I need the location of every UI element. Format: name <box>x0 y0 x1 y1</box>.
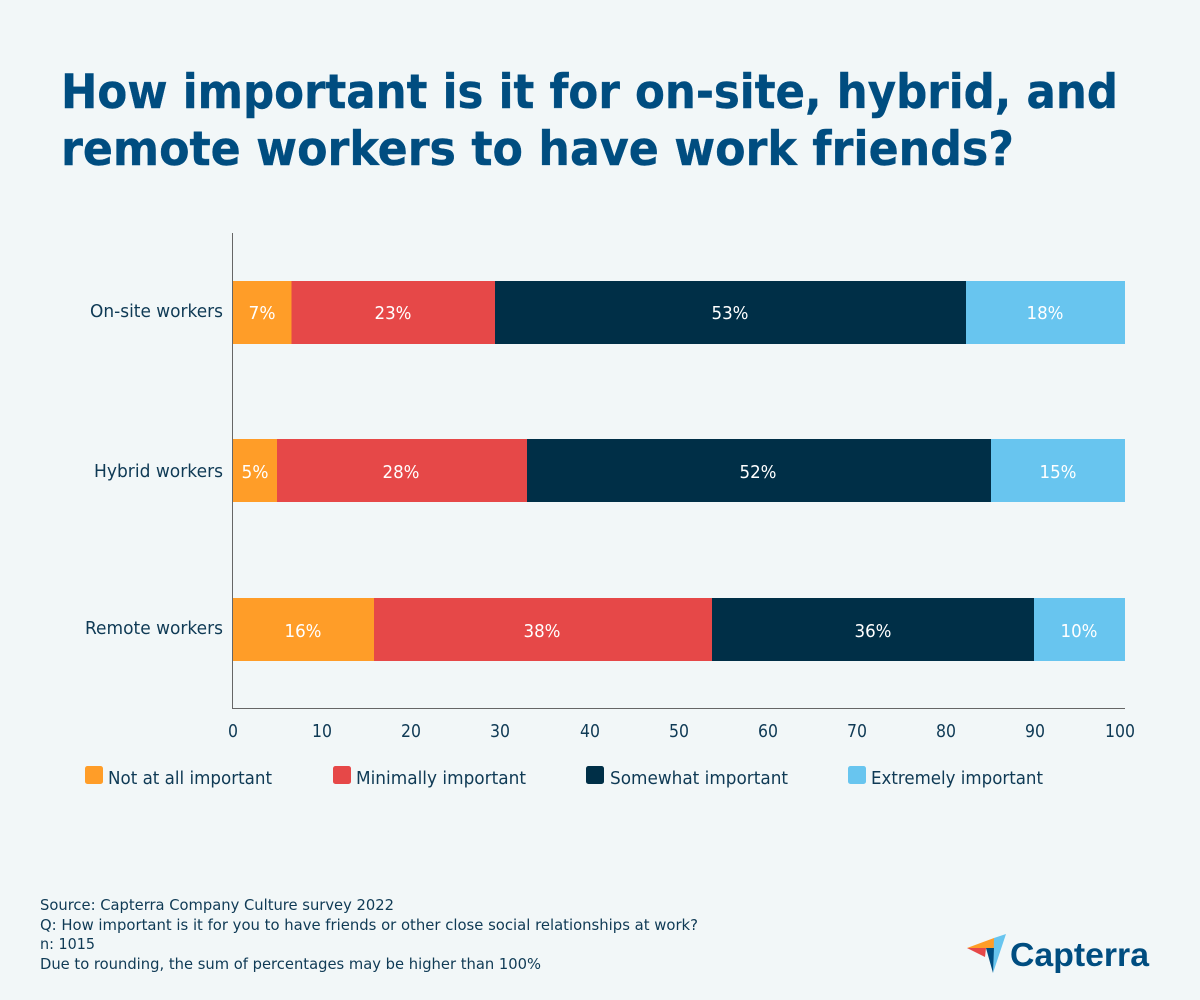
bar: hybrid workers: 15% <box>1040 463 1076 483</box>
x axis labels: 10 <box>312 722 332 742</box>
source notes: Source: Capterra Company Culture survey 2022 <box>40 896 394 914</box>
x axis labels: 0 <box>228 722 238 742</box>
x axis labels: 50 <box>669 722 689 742</box>
bar: on-site workers: 23% <box>374 304 412 324</box>
title <box>61 65 1118 177</box>
bar: on-site workers: 7% <box>248 304 276 324</box>
bar: hybrid workers: 52% <box>740 463 776 483</box>
x axis labels: 40 <box>580 722 600 742</box>
bar: on-site workers <box>233 281 1125 344</box>
bar: hybrid workers: 28% <box>382 463 420 483</box>
category labels <box>85 302 223 639</box>
bar: remote workers <box>233 598 1125 661</box>
source notes: n: 1015 <box>40 935 95 953</box>
source notes <box>40 896 698 973</box>
legend: minimally important: Minimally important <box>356 769 526 789</box>
bar: remote workers: 10% <box>1060 622 1098 642</box>
legend: extremely important: Extremely important <box>871 769 1043 789</box>
source notes: Q: How important is it for you to have friends or other close social relationships at work? <box>40 916 698 934</box>
bar: remote workers: 16% <box>284 622 322 642</box>
icon: paper plane <box>967 934 1006 973</box>
bar: on-site workers: 53% <box>712 304 748 324</box>
Capterra logo <box>967 934 1149 974</box>
x axis labels <box>228 722 1135 742</box>
title: How important is it for on-site, hybrid, and <box>61 65 1118 120</box>
chart axes <box>232 233 1125 708</box>
x axis labels: 80 <box>936 722 956 742</box>
x axis labels: 100 <box>1105 722 1135 742</box>
bar: on-site workers: 18% <box>1026 304 1064 324</box>
source notes: Due to rounding, the sum of percentages may be higher than 100% <box>40 955 541 973</box>
x axis labels: 70 <box>847 722 867 742</box>
wordmark: Capterra <box>1010 937 1149 974</box>
x axis labels: 30 <box>490 722 510 742</box>
x axis labels: 90 <box>1025 722 1045 742</box>
title: remote workers to have work friends? <box>61 122 1014 177</box>
category labels: Hybrid workers <box>94 462 223 482</box>
x axis labels: 20 <box>401 722 421 742</box>
bar: remote workers: 36% <box>854 622 892 642</box>
legend <box>85 766 1043 789</box>
x axis labels: 60 <box>758 722 778 742</box>
bar: remote workers: 38% <box>524 622 560 642</box>
category labels: On-site workers <box>90 302 223 322</box>
legend: somewhat important: Somewhat important <box>610 769 788 789</box>
bar: hybrid workers <box>233 439 1125 502</box>
bar: hybrid workers: 5% <box>242 463 268 483</box>
category labels: Remote workers <box>85 619 223 639</box>
legend: not at all important: Not at all important <box>108 769 272 789</box>
stacked bar chart <box>85 233 1135 742</box>
